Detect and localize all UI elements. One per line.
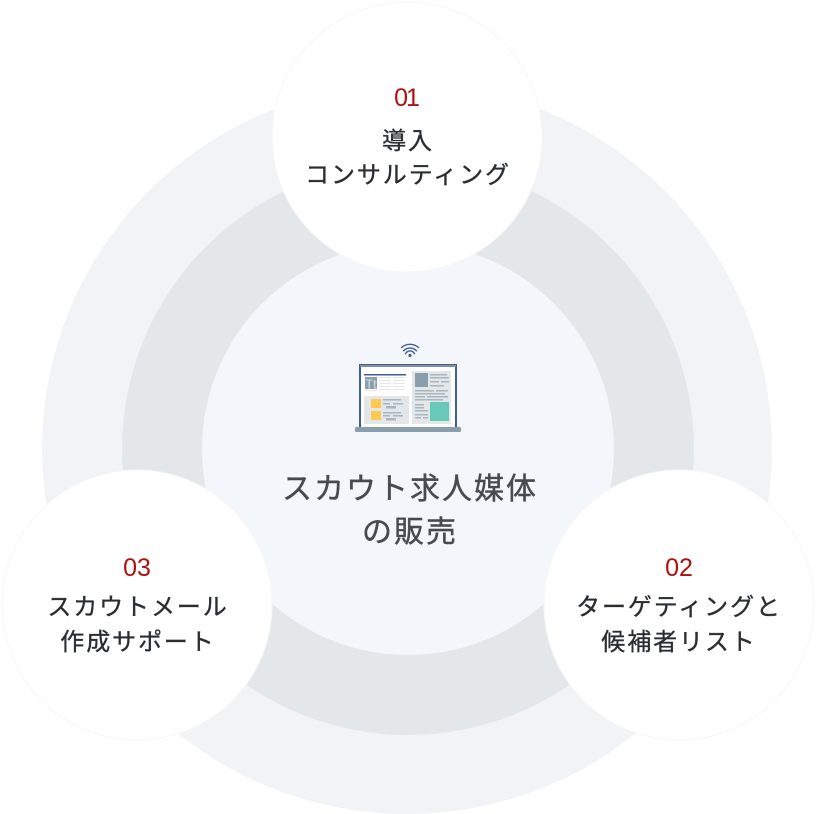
icon: wifi signal bbox=[402, 344, 418, 357]
central circle bbox=[202, 243, 614, 655]
icon: laptop: Tt bbox=[365, 376, 377, 392]
label 03: スカウトメール bbox=[47, 594, 229, 621]
label 02: ターゲティングと bbox=[576, 594, 782, 621]
node 03: スカウトメール作成サポート bbox=[2, 470, 272, 740]
node 02: ターゲティングと候補者リスト: 候補者リスト bbox=[601, 629, 757, 656]
icon: laptop bbox=[355, 364, 461, 432]
main heading bbox=[282, 473, 538, 549]
main heading: の販売 bbox=[362, 516, 458, 549]
number 02: 02 bbox=[665, 554, 693, 582]
main heading: スカウト求人媒体 bbox=[282, 473, 538, 506]
node 03: スカウトメール作成サポート: 作成サポート bbox=[60, 629, 216, 656]
number 03: 03 bbox=[123, 554, 151, 582]
node 01: 導入コンサルティング: コンサルティング bbox=[305, 162, 511, 189]
middle ring bbox=[122, 163, 694, 735]
number 01: 01 bbox=[394, 84, 419, 112]
node 01: 導入コンサルティング bbox=[272, 2, 542, 272]
node 02: ターゲティングと候補者リスト bbox=[544, 470, 814, 740]
label 01: 導入 bbox=[382, 128, 434, 155]
